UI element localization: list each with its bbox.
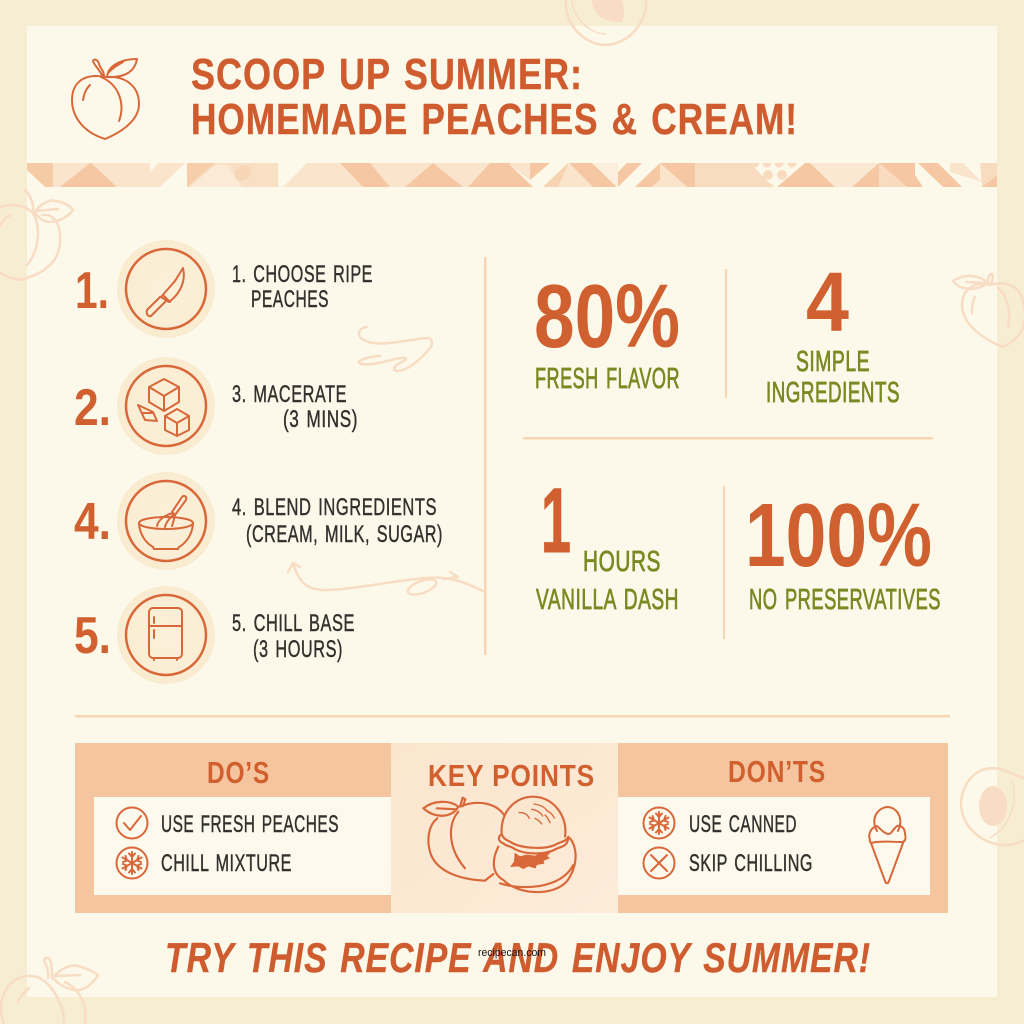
title: SCOOP UP SUMMER: xyxy=(191,51,583,99)
panel: do's: CHILL MIXTURE xyxy=(161,850,292,877)
watermark: recipecan.com xyxy=(478,947,546,959)
decorative swirl xyxy=(359,327,432,371)
panel: don'ts: USE CANNED xyxy=(689,811,797,838)
icon: cross xyxy=(644,848,674,878)
stat: 1: 1 xyxy=(541,470,571,572)
stat: 80% xyxy=(534,267,680,395)
title xyxy=(191,51,798,144)
step 2: 2. xyxy=(74,379,111,437)
step 4: (CREAM, MILK, SUGAR) xyxy=(246,521,443,548)
step 5: 5. CHILL BASE xyxy=(232,610,355,637)
icon: knife xyxy=(147,268,184,316)
panel: don'ts: SKIP CHILLING xyxy=(689,850,813,877)
decorative geometric strip xyxy=(27,163,997,187)
stat: 4 xyxy=(766,255,900,409)
step 2: 3. MACERATE xyxy=(232,381,347,408)
step 4: 4. xyxy=(74,493,111,551)
stat: 80%: FRESH FLAVOR xyxy=(535,363,680,395)
step 4: 4. BLEND INGREDIENTS xyxy=(232,494,437,521)
icon: header peach xyxy=(72,59,139,139)
panel: don'ts xyxy=(618,743,948,913)
stat: 100%: 100% xyxy=(745,486,932,586)
decorative peach: bottom left xyxy=(1,958,98,1024)
icon: snowflake xyxy=(116,848,148,878)
step 5: 5. xyxy=(74,607,111,665)
icon: fridge xyxy=(149,608,182,660)
stat: 1: VANILLA DASH xyxy=(536,584,679,616)
icon: check xyxy=(116,808,148,838)
stat: 4: INGREDIENTS xyxy=(766,377,900,409)
title: HOMEMADE PEACHES & CREAM! xyxy=(191,96,798,144)
step 4 xyxy=(74,472,443,570)
step 5: (3 HOURS) xyxy=(253,636,343,663)
step 5 xyxy=(74,586,355,684)
panel: statistics xyxy=(523,255,941,639)
step 2: (3 MINS) xyxy=(283,406,358,433)
stat: 4: SIMPLE xyxy=(796,346,870,378)
icon: peach cubes xyxy=(138,379,189,436)
decorative peach: top xyxy=(566,0,646,45)
heading: do's: DO’S xyxy=(207,755,270,790)
vertical divider between steps and stats xyxy=(484,257,486,655)
step 1: PEACHES xyxy=(251,286,329,313)
step 1: 1. CHOOSE RIPE xyxy=(232,261,373,288)
panel: do's xyxy=(75,743,391,913)
call to action: TRY THIS RECIPE AND ENJOY SUMMER! xyxy=(165,934,871,981)
icon: ice cream cone xyxy=(869,807,906,883)
stat: 80%: 80% xyxy=(534,267,680,367)
panel: key points xyxy=(391,743,618,913)
decorative peach: right top xyxy=(953,274,1024,347)
stat: 1: HOURS xyxy=(583,546,661,578)
heading: don'ts: DON’TS xyxy=(728,754,826,789)
panel: recipe steps xyxy=(74,240,443,684)
decorative peach half: right xyxy=(961,768,1024,845)
illustration: peach and ice cream scoop xyxy=(423,797,576,892)
step 1 xyxy=(75,240,373,338)
heading: key points: KEY POINTS xyxy=(428,758,595,793)
decorative arrow xyxy=(288,563,485,598)
icon: snowflake xyxy=(644,808,674,838)
icon: bowl and whisk xyxy=(139,496,193,549)
decorative peach: left xyxy=(0,190,73,280)
header xyxy=(72,51,798,144)
stat: 1 xyxy=(536,470,679,616)
panel: do's: USE FRESH PEACHES xyxy=(161,811,339,838)
step 1: 1. xyxy=(75,262,109,320)
stat: 4: 4 xyxy=(806,255,849,349)
step 2 xyxy=(74,357,358,455)
stat: 100% xyxy=(745,486,941,616)
